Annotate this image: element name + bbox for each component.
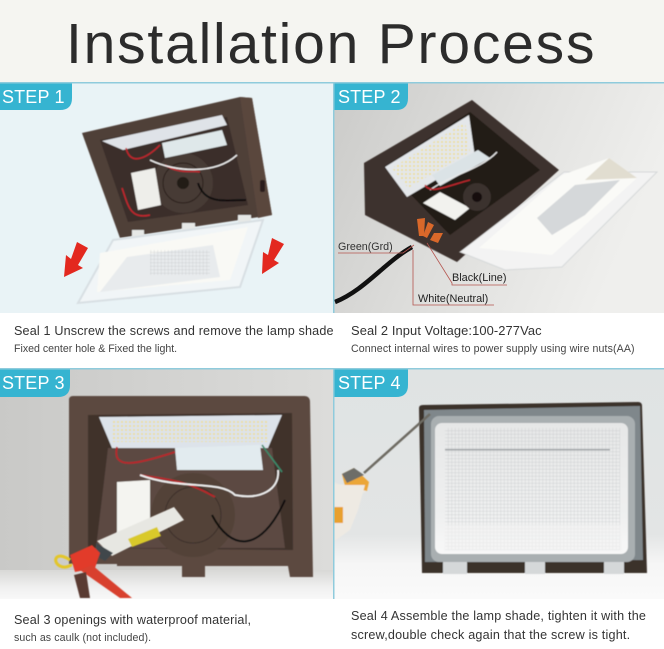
step 3 note: such as caulk (not included). [14,632,151,644]
step 3 photo background [0,369,333,599]
step 3 caption: Seal 3 openings with waterproof material, [14,613,251,627]
step 2 note: Connect internal wires to power supply using wire nuts(AA) [351,343,635,355]
header band [0,0,664,83]
label: green wire: Green(Grd) [338,241,393,253]
step 4 label: STEP 4 [338,373,401,393]
step 2 badge [334,83,408,110]
step 3 badge [0,369,70,397]
step 2 photo background [334,83,664,313]
step 1 label: STEP 1 [2,87,65,107]
step 1 caption: Seal 1 Unscrew the screws and remove the lamp shade [14,324,334,338]
icon: right red arrow [262,238,284,274]
icon: orange wire nuts [417,218,443,243]
icon: fixture front [69,396,313,577]
label: black wire: Black(Line) [452,272,506,284]
icon: fixture on table [364,100,559,262]
icon: lamp shade opened [460,158,657,270]
panel: step 3 [0,369,333,644]
step 4 caption line 1: Seal 4 Assemble the lamp shade, tighten it with the [351,609,646,623]
label: white wire: White(Neutral) [418,293,488,305]
icon: power cable [335,247,412,302]
step 2 caption: Seal 2 Input Voltage:100-277Vac [351,323,542,338]
step 4 badge [334,369,408,397]
title: Installation Process [66,12,596,76]
wire label lines [338,243,507,305]
step 1 photo background [0,83,333,313]
icon: screwdriver and gloved hand [334,414,430,540]
panel: step 4 [334,369,664,642]
step 2 label: STEP 2 [338,87,401,107]
panel borders [0,82,664,599]
panel: step 2 [334,83,664,355]
icon: fixture with open housing [82,97,272,238]
icon: removed lamp shade [78,220,263,303]
step 3 floor [0,570,333,599]
step 1 badge [0,83,72,110]
step 4 photo background [334,369,664,599]
step 4 caption line 2: screw,double check again that the screw is tight. [351,628,630,642]
step 3 label: STEP 3 [2,373,65,393]
panel: step 1 [0,83,334,355]
icon: caulk gun [56,507,184,598]
icon: left red arrow [64,242,88,277]
icon: assembled fixture [419,402,647,574]
step 1 note: Fixed center hole & Fixed the light. [14,343,177,355]
